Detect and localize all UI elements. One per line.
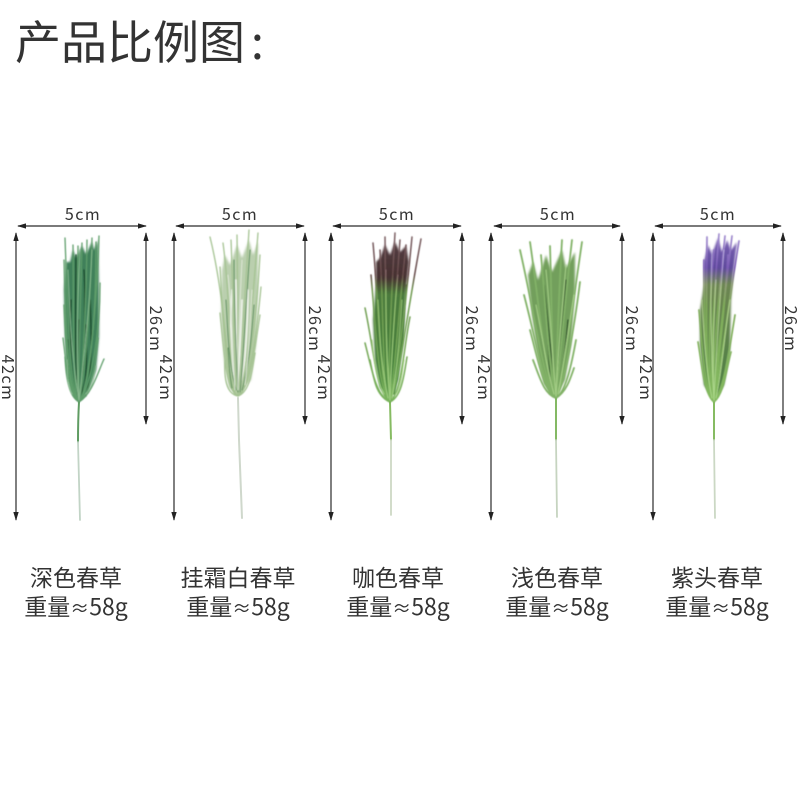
plant: dark green grass [63, 236, 104, 520]
column: frosted white grass [155, 201, 328, 622]
title: 产品比例图: [15, 7, 264, 73]
dimension: height 42cm: 42cm [473, 355, 497, 401]
plant: light green grass [520, 240, 582, 517]
label: purple-head spring grass [665, 559, 769, 622]
label: dark spring grass: 重量≈58g [24, 588, 128, 622]
label: light spring grass: 重量≈58g [505, 588, 609, 622]
dimension: head 26cm: 26cm [145, 306, 169, 352]
label: dark spring grass: 深色春草 [30, 559, 122, 593]
label: coffee spring grass [346, 559, 450, 622]
dimension: head 26cm: 26cm [304, 306, 328, 352]
column: dark spring grass [0, 201, 169, 622]
dimension: width 5cm: 5cm [540, 201, 576, 225]
dimension: width 5cm: 5cm [65, 201, 101, 225]
dimension: width 5cm [176, 201, 304, 226]
plant: purple-head grass [698, 234, 739, 518]
dimension: width 5cm [333, 201, 461, 226]
column: coffee spring grass [313, 201, 485, 622]
dimension: head 26cm: 26cm [621, 306, 645, 352]
dimension: height 42cm: 42cm [635, 355, 659, 401]
dimension: height 42cm: 42cm [155, 355, 179, 401]
label: frosted white grass: 重量≈58g [186, 588, 290, 622]
dimension: width 5cm: 5cm [222, 201, 258, 225]
label: coffee spring grass: 咖色春草 [352, 559, 444, 593]
dimension: width 5cm [18, 201, 146, 226]
dimension: width 5cm: 5cm [700, 201, 736, 225]
label: light spring grass: 浅色春草 [511, 559, 603, 593]
column: light spring grass [473, 201, 645, 622]
label: purple-head spring grass: 紫头春草 [671, 559, 763, 593]
dimension: head 26cm: 26cm [461, 306, 485, 352]
dimension: width 5cm: 5cm [379, 201, 415, 225]
dimension: height 42cm: 42cm [313, 355, 337, 401]
label: purple-head spring grass: 重量≈58g [665, 588, 769, 622]
label: frosted white grass [180, 559, 296, 622]
column: purple-head spring grass [635, 201, 800, 622]
plant: frosted grass [210, 230, 261, 518]
dimension: width 5cm [655, 201, 781, 226]
label: light spring grass [505, 559, 609, 622]
plant: coffee grass [365, 233, 421, 515]
label: dark spring grass [24, 559, 128, 622]
label: frosted white grass: 挂霜白春草 [180, 559, 296, 593]
label: coffee spring grass: 重量≈58g [346, 588, 450, 622]
dimension: width 5cm [494, 201, 620, 226]
